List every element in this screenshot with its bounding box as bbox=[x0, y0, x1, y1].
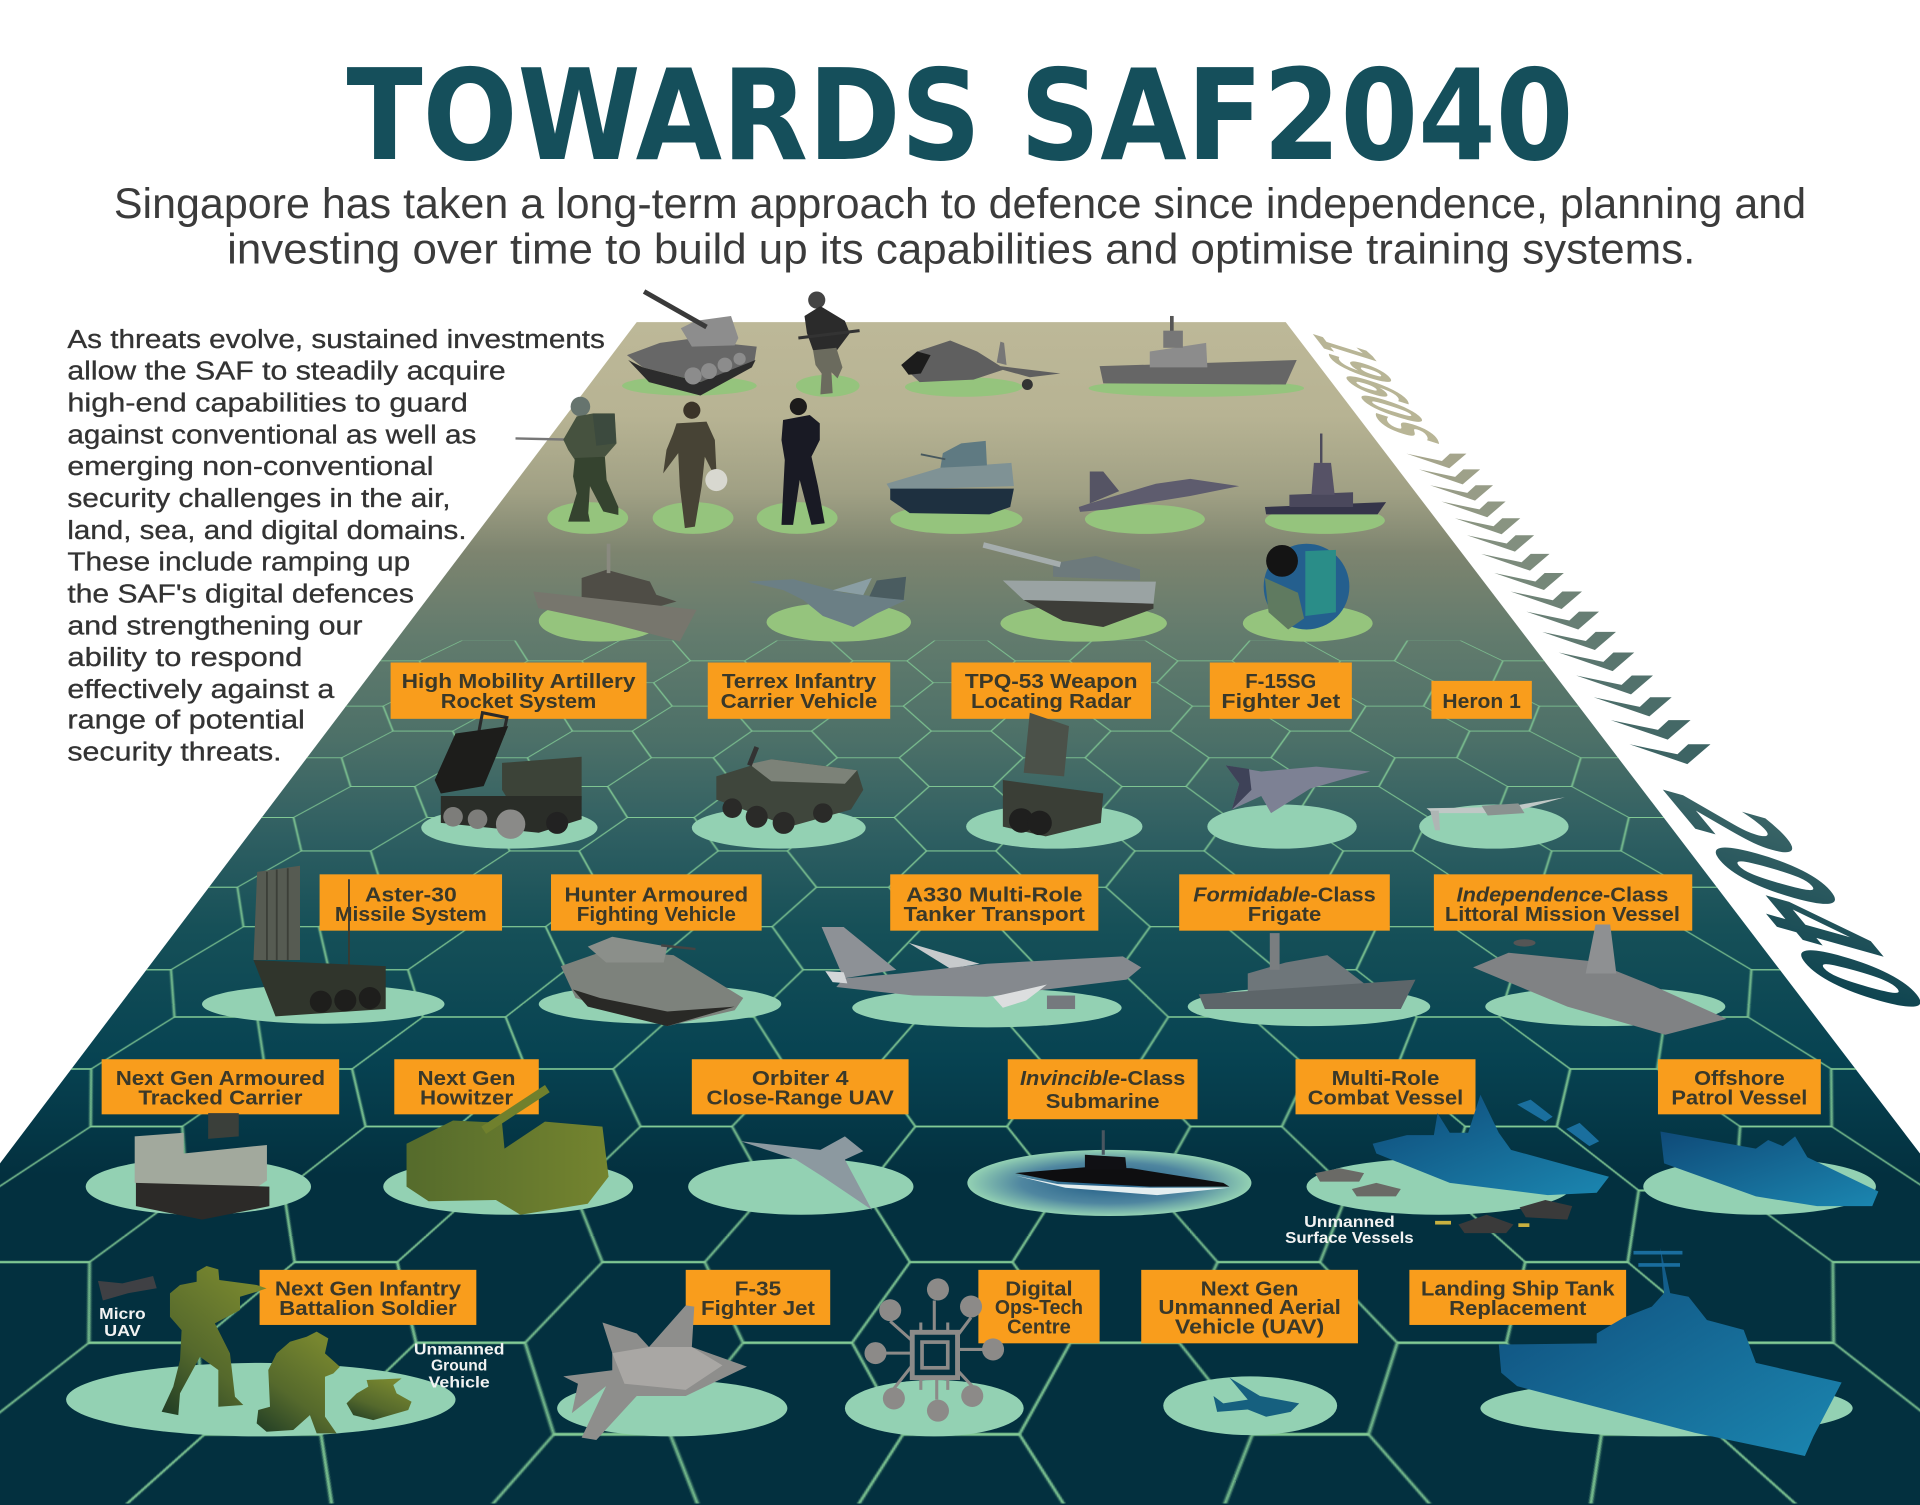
intro text block: and strengthening our bbox=[67, 612, 363, 640]
icon: officer bbox=[757, 398, 838, 534]
label: Hunter Armoured Fighting Vehicle bbox=[551, 874, 762, 931]
icon: Leopard tank bbox=[983, 545, 1167, 642]
icon: pilot bbox=[653, 402, 733, 534]
intro text block: emerging non-conventional bbox=[67, 453, 433, 481]
subtitle: investing over time to build up its capabilities and optimise training systems. bbox=[227, 225, 1695, 273]
label: Next Gen Armoured Tracked Carrier: Tracked Carrier bbox=[138, 1088, 303, 1110]
label: Orbiter 4 Close-Range UAV: Orbiter 4 bbox=[752, 1068, 849, 1090]
label: Digital Ops-Tech Centre: Ops-Tech bbox=[995, 1297, 1083, 1319]
icon: Formidable-class frigate bbox=[1188, 933, 1430, 1026]
label: Aster-30 Missile System: Missile System bbox=[335, 904, 487, 926]
label: Unmanned Ground Vehicle: Ground bbox=[431, 1357, 487, 1374]
intro text block: security challenges in the air, bbox=[67, 485, 451, 513]
icon: Terrex vehicle bbox=[692, 747, 866, 849]
label: Unmanned Ground Vehicle: Vehicle bbox=[429, 1374, 490, 1391]
icon: F-16 fighter bbox=[748, 577, 911, 642]
label: Terrex Infantry Carrier Vehicle: Carrier Vehicle bbox=[721, 691, 877, 713]
subtitle bbox=[114, 180, 1806, 273]
label: TPQ-53 Weapon Locating Radar: TPQ-53 Weapon bbox=[965, 671, 1138, 693]
label: Offshore Patrol Vessel: Offshore bbox=[1694, 1068, 1785, 1090]
label: A330 Multi-Role Tanker Transport bbox=[890, 874, 1098, 931]
label: Next Gen Armoured Tracked Carrier bbox=[102, 1059, 339, 1114]
icon: landing ship bbox=[533, 544, 696, 642]
icon: Hunter armoured fighting vehicle bbox=[539, 937, 781, 1026]
icon: patrol ship 1960s bbox=[1089, 316, 1304, 397]
intro text block: effectively against a bbox=[67, 676, 335, 704]
label: Next Gen Unmanned Aerial Vehicle (UAV) bbox=[1141, 1270, 1358, 1343]
intro text block: allow the SAF to steadily acquire bbox=[67, 358, 506, 386]
label: Next Gen Infantry Battalion Soldier: Next Gen Infantry bbox=[275, 1279, 462, 1301]
intro text block: against conventional as well as bbox=[67, 421, 476, 449]
label: Micro UAV: Micro bbox=[99, 1306, 146, 1323]
icon: AMX-13 tank bbox=[622, 291, 757, 396]
icon: missile gunboat bbox=[1265, 434, 1386, 534]
icon: Orbiter 4 UAV bbox=[688, 1136, 913, 1215]
label: Terrex Infantry Carrier Vehicle: Terrex Infantry bbox=[722, 671, 877, 693]
label: Aster-30 Missile System bbox=[320, 874, 502, 931]
icon: infantry soldier bbox=[516, 397, 628, 534]
icon: F-35 fighter bbox=[557, 1305, 787, 1440]
label: Hunter Armoured Fighting Vehicle: Hunter Armoured bbox=[564, 884, 748, 906]
label: Terrex Infantry Carrier Vehicle bbox=[708, 662, 890, 719]
label: Next Gen Unmanned Aerial Vehicle (UAV): Unmanned Aerial bbox=[1158, 1297, 1341, 1319]
icon: HIMARS bbox=[421, 713, 598, 849]
label: High Mobility Artillery Rocket System: High Mobility Artillery bbox=[402, 671, 636, 693]
label: F-35 Fighter Jet bbox=[686, 1270, 830, 1325]
label: Micro UAV bbox=[99, 1306, 146, 1340]
icon: Hunter jet bbox=[901, 340, 1060, 397]
label: Unmanned Surface Vessels: Surface Vessels bbox=[1285, 1230, 1414, 1247]
label: Formidable-Class Frigate: Formidable -Class bbox=[1193, 884, 1376, 906]
icon: Landing Ship Tank Replacement bbox=[1480, 1248, 1853, 1456]
label: Multi-Role Combat Vessel bbox=[1296, 1059, 1476, 1114]
label: Next Gen Unmanned Aerial Vehicle (UAV): Next Gen bbox=[1201, 1279, 1299, 1301]
label: Micro UAV: UAV bbox=[104, 1323, 142, 1340]
intro text block: high-end capabilities to guard bbox=[67, 389, 468, 417]
intro text block bbox=[67, 326, 605, 766]
label: Multi-Role Combat Vessel: Combat Vessel bbox=[1308, 1088, 1463, 1110]
icon: Multi-Role Combat Vessel with unmanned surface vessels bbox=[1307, 1095, 1609, 1233]
label: TPQ-53 Weapon Locating Radar: Locating Radar bbox=[971, 691, 1132, 713]
label: Landing Ship Tank Replacement bbox=[1409, 1270, 1626, 1325]
label: TPQ-53 Weapon Locating Radar bbox=[951, 662, 1151, 719]
label: Next Gen Infantry Battalion Soldier: Battalion Soldier bbox=[279, 1298, 457, 1320]
label: Landing Ship Tank Replacement: Replacement bbox=[1449, 1298, 1587, 1320]
label: Unmanned Ground Vehicle: Unmanned bbox=[414, 1341, 504, 1358]
timeline arrows bbox=[1406, 454, 1710, 764]
label: Unmanned Ground Vehicle bbox=[414, 1341, 504, 1391]
label: Digital Ops-Tech Centre bbox=[978, 1270, 1100, 1343]
label: Invincible-Class Submarine: Invincible -Class bbox=[1020, 1068, 1185, 1090]
label: F-35 Fighter Jet: Fighter Jet bbox=[701, 1298, 815, 1320]
label: F-35 Fighter Jet: F-35 bbox=[735, 1279, 781, 1301]
label: Heron 1: Heron 1 bbox=[1442, 691, 1521, 713]
label: F-15SG Fighter Jet bbox=[1210, 662, 1352, 719]
timeline label: 1960s: 1960S bbox=[1291, 325, 1458, 453]
label: Next Gen Unmanned Aerial Vehicle (UAV): Vehicle (UAV) bbox=[1175, 1317, 1324, 1339]
label: Orbiter 4 Close-Range UAV: Close-Range UAV bbox=[707, 1088, 894, 1110]
label: Formidable-Class Frigate bbox=[1179, 874, 1390, 931]
label: Next Gen Howitzer bbox=[394, 1059, 539, 1114]
label: F-15SG Fighter Jet: Fighter Jet bbox=[1221, 691, 1341, 713]
intro text block: ability to respond bbox=[67, 644, 302, 672]
icon: Next Gen Armoured Tracked Carrier bbox=[86, 1113, 311, 1220]
label: Heron 1 bbox=[1431, 681, 1532, 719]
label: Hunter Armoured Fighting Vehicle: Fighting Vehicle bbox=[577, 904, 736, 926]
label: Offshore Patrol Vessel bbox=[1658, 1059, 1821, 1114]
icon: digital ops-tech chip bbox=[845, 1278, 1024, 1436]
label: Next Gen Howitzer: Howitzer bbox=[420, 1088, 513, 1110]
icon: A330 tanker bbox=[822, 927, 1141, 1027]
label: A330 Multi-Role Tanker Transport: A330 Multi-Role bbox=[906, 884, 1082, 906]
label: Independence-Class Littoral Mission Vessel: Independence -Class bbox=[1457, 884, 1668, 906]
label: Digital Ops-Tech Centre: Centre bbox=[1007, 1317, 1071, 1339]
label: High Mobility Artillery Rocket System bbox=[391, 662, 647, 719]
icon: Heron 1 UAV bbox=[1419, 797, 1569, 849]
label: Multi-Role Combat Vessel: Multi-Role bbox=[1332, 1068, 1439, 1090]
intro text block: range of potential bbox=[67, 707, 305, 735]
icon: F-15SG bbox=[1207, 765, 1370, 849]
label: A330 Multi-Role Tanker Transport: Tanker Transport bbox=[904, 904, 1085, 926]
label: F-15SG Fighter Jet: F-15SG bbox=[1245, 671, 1316, 693]
label: Next Gen Armoured Tracked Carrier: Next Gen Armoured bbox=[116, 1068, 325, 1090]
label: Unmanned Surface Vessels: Unmanned bbox=[1304, 1214, 1395, 1231]
label: High Mobility Artillery Rocket System: Rocket System bbox=[441, 691, 596, 713]
label: Unmanned Surface Vessels bbox=[1285, 1214, 1414, 1247]
icon: Bionix infantry fighting vehicle bbox=[887, 441, 1022, 534]
intro text block: These include ramping up bbox=[67, 549, 410, 577]
icon: Invincible-class submarine bbox=[967, 1130, 1251, 1216]
subtitle: Singapore has taken a long-term approach to defence since independence, planning and bbox=[114, 180, 1806, 228]
label: Formidable-Class Frigate: Frigate bbox=[1248, 904, 1321, 926]
label: Next Gen Infantry Battalion Soldier bbox=[260, 1270, 476, 1325]
intro text block: land, sea, and digital domains. bbox=[67, 517, 467, 545]
label: Landing Ship Tank Replacement: Landing Ship Tank bbox=[1421, 1279, 1615, 1301]
icon: Offshore Patrol Vessel bbox=[1643, 1131, 1878, 1215]
icon: Next Gen Howitzer bbox=[383, 1089, 633, 1215]
label: Digital Ops-Tech Centre: Digital bbox=[1005, 1279, 1073, 1301]
label: Orbiter 4 Close-Range UAV bbox=[692, 1059, 909, 1114]
label: Next Gen Howitzer: Next Gen bbox=[418, 1068, 516, 1090]
label: Aster-30 Missile System: Aster-30 bbox=[365, 884, 457, 906]
icon: micro UAV bbox=[98, 1276, 157, 1300]
label: Offshore Patrol Vessel: Patrol Vessel bbox=[1671, 1088, 1807, 1110]
icon: Next Gen UAV bbox=[1163, 1376, 1337, 1435]
intro text block: As threats evolve, sustained investments bbox=[67, 326, 605, 354]
icon: running soldier bbox=[796, 291, 860, 397]
intro text block: the SAF's digital defences bbox=[67, 580, 414, 608]
icon: F-5 fighter bbox=[1079, 471, 1239, 534]
icon: TPQ-53 radar bbox=[966, 713, 1142, 849]
label: Independence-Class Littoral Mission Vessel bbox=[1434, 874, 1692, 931]
label: Invincible-Class Submarine: Submarine bbox=[1046, 1091, 1160, 1113]
icon: cyber soldier bbox=[1243, 544, 1373, 642]
label: Invincible-Class Submarine bbox=[1008, 1059, 1198, 1119]
icon: Independence-class vessel bbox=[1473, 925, 1727, 1035]
title: TOWARDS SAF2040 bbox=[347, 42, 1573, 189]
intro text block: security threats. bbox=[67, 738, 282, 766]
icon: Next Gen Infantry soldiers and ground vehicle bbox=[66, 1266, 456, 1436]
icon: Aster-30 launcher bbox=[202, 866, 444, 1024]
label: Independence-Class Littoral Mission Vessel: Littoral Mission Vessel bbox=[1445, 904, 1680, 926]
